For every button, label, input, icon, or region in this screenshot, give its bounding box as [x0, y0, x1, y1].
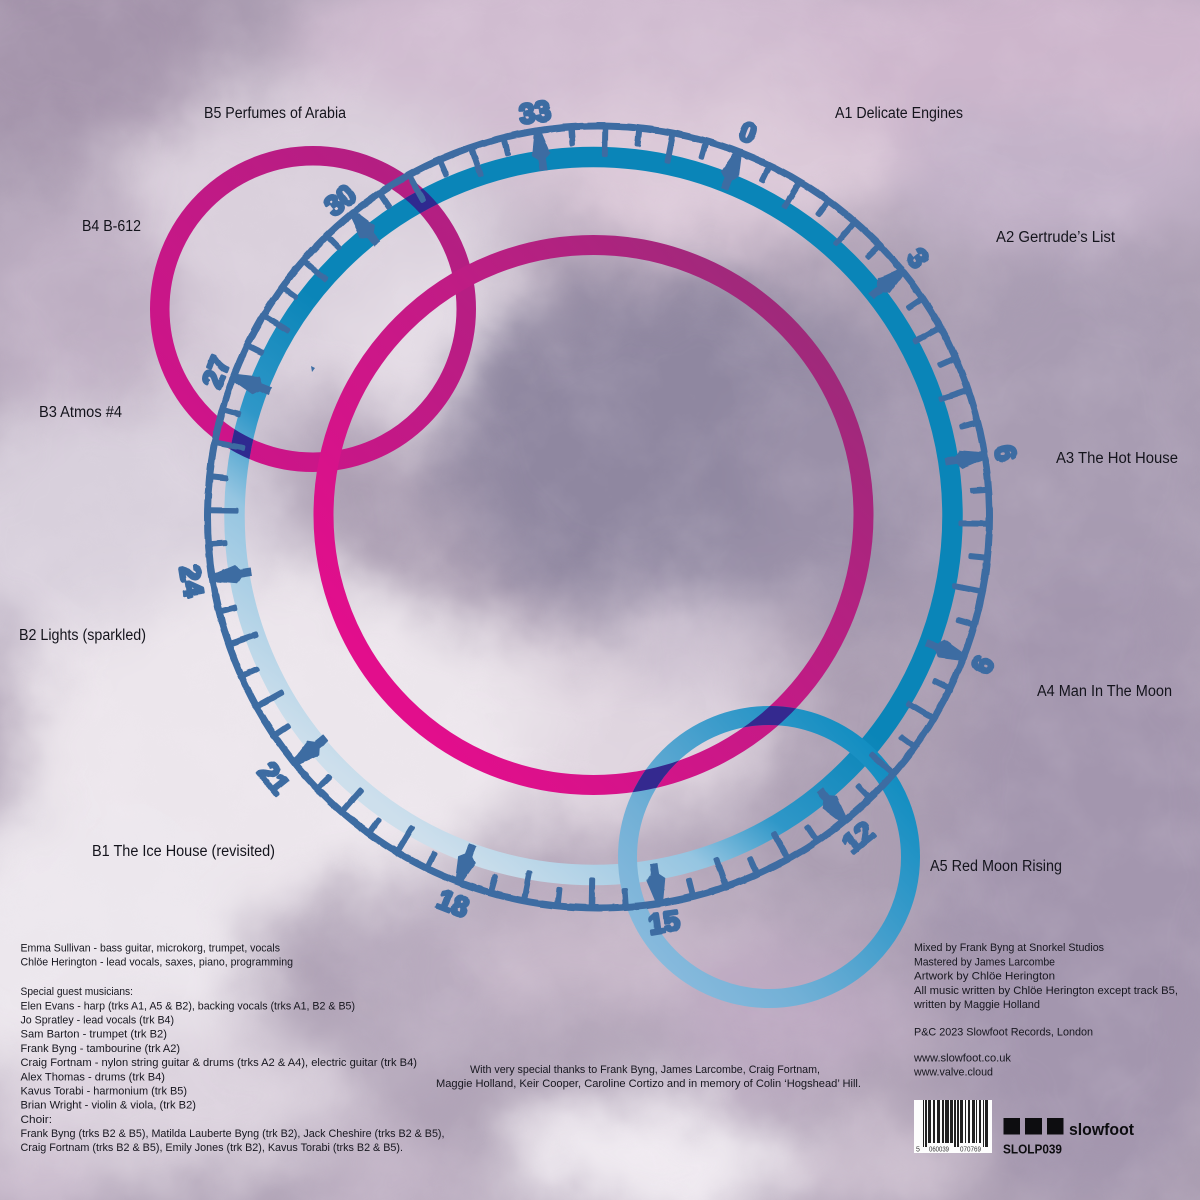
track list labels: B1 The Ice House (revisited): [92, 843, 275, 860]
dial: ticks and arc: [186, 105, 1011, 929]
ring: small magenta circle upper left: [160, 156, 466, 462]
credits: special thanks: [436, 1064, 861, 1090]
credits: production: written by Maggie Holland: [913, 999, 1040, 1011]
credits: musicians: Brian Wright - violin & viola, (trk B2): [20, 1100, 196, 1112]
barcode: 5: [916, 1146, 920, 1154]
credits: musicians: Emma Sullivan - bass guitar, microkorg, trumpet, vocals: [20, 942, 280, 954]
dial numbers: 18: [433, 883, 473, 923]
track list labels: A3 The Hot House: [1056, 450, 1178, 467]
ring: large magenta circle: [324, 245, 864, 785]
credits: musicians: Alex Thomas - drums (trk B4): [20, 1071, 165, 1083]
track list labels: B3 Atmos #4: [39, 404, 122, 421]
dial numbers: 30: [318, 178, 362, 222]
overlap: small blue ring crossing large magenta: [632, 706, 796, 792]
track list labels: A5 Red Moon Rising: [930, 858, 1062, 875]
dial numbers: 3: [901, 242, 935, 274]
credits: musicians: Jo Spratley - lead vocals (trk B4): [20, 1014, 174, 1026]
credits: production: Mastered by James Larcombe: [914, 956, 1055, 968]
ring: large blue circle: [234, 157, 952, 875]
credits: production: Mixed by Frank Byng at Snorkel Studios: [914, 942, 1104, 954]
dial numbers: 21: [252, 756, 296, 800]
credits: special thanks: Maggie Holland, Keir Cooper, Caroline Cortizo and in memory of Colin ‘Hogshead’ Hill.: [436, 1078, 861, 1090]
barcode: 070769: [960, 1146, 981, 1154]
logo: slowfoot squares and wordmark: slowfoot: [1069, 1120, 1134, 1139]
dial numbers: 33: [517, 95, 553, 130]
credits: production: All music written by Chlöe Herington except track B5,: [914, 985, 1178, 997]
credits: production: www.slowfoot.co.uk: [913, 1053, 1011, 1065]
credits: musicians: Choir:: [20, 1114, 52, 1126]
track list labels: A2 Gertrude’s List: [996, 229, 1116, 246]
credits: production: Artwork by Chlöe Herington: [914, 971, 1055, 983]
credits: special thanks: With very special thanks to Frank Byng, James Larcombe, Craig Fortnam,: [470, 1064, 820, 1076]
credits: musicians: Kavus Torabi - harmonium (trk B5): [20, 1086, 187, 1098]
credits: musicians: [20, 942, 444, 1154]
speck: [311, 366, 315, 372]
credits: production: [913, 942, 1178, 1079]
credits: musicians: Craig Fortnam (trks B2 & B5), Emily Jones (trk B2), Kavus Torabi (trks B2 & B5).: [20, 1142, 403, 1154]
credits: musicians: Frank Byng - tambourine (trk A2): [20, 1043, 180, 1055]
dial numbers: 6: [989, 443, 1022, 463]
dial numbers: 24: [174, 563, 210, 599]
overlap: blue ring crossing small magenta: [230, 188, 438, 459]
dial numbers: [174, 95, 1022, 940]
credits: production: www.valve.cloud: [913, 1067, 993, 1079]
dial numbers: 0: [735, 115, 761, 150]
credits: musicians: Special guest musicians:: [20, 986, 133, 998]
barcode: 060039: [929, 1146, 949, 1154]
dial numbers: 27: [196, 352, 236, 392]
dial numbers: 15: [646, 905, 682, 940]
dial numbers: 9: [965, 652, 1000, 678]
track list labels: B5 Perfumes of Arabia: [204, 105, 346, 122]
credits: musicians: Chlöe Herington - lead vocals, saxes, piano, programming: [20, 957, 293, 969]
credits: musicians: Craig Fortnam - nylon string guitar & drums (trks A2 & A4), electric guitar (trk B4): [20, 1057, 417, 1069]
logo: slowfoot squares and wordmark: [1004, 1118, 1134, 1139]
dial numbers: 12: [836, 815, 880, 859]
track list labels: A4 Man In The Moon: [1037, 683, 1172, 700]
credits: production: P&C 2023 Slowfoot Records, London: [914, 1027, 1093, 1039]
track list labels: [19, 105, 1178, 875]
track list labels: B4 B-612: [82, 218, 141, 235]
track list labels: A1 Delicate Engines: [835, 105, 963, 122]
catalogue number: SLOLP039: [1003, 1142, 1062, 1156]
credits: musicians: Frank Byng (trks B2 & B5), Matilda Lauberte Byng (trk B2), Jack Cheshire (trks B2 & B5),: [20, 1128, 444, 1140]
credits: musicians: Elen Evans - harp (trks A1, A5 & B2), backing vocals (trks A1, B2 & B5): [20, 1000, 355, 1012]
ring: small blue circle lower right: [628, 716, 910, 998]
track list labels: B2 Lights (sparkled): [19, 627, 146, 644]
credits: musicians: Sam Barton - trumpet (trk B2): [20, 1029, 167, 1041]
barcode: [914, 1100, 992, 1154]
